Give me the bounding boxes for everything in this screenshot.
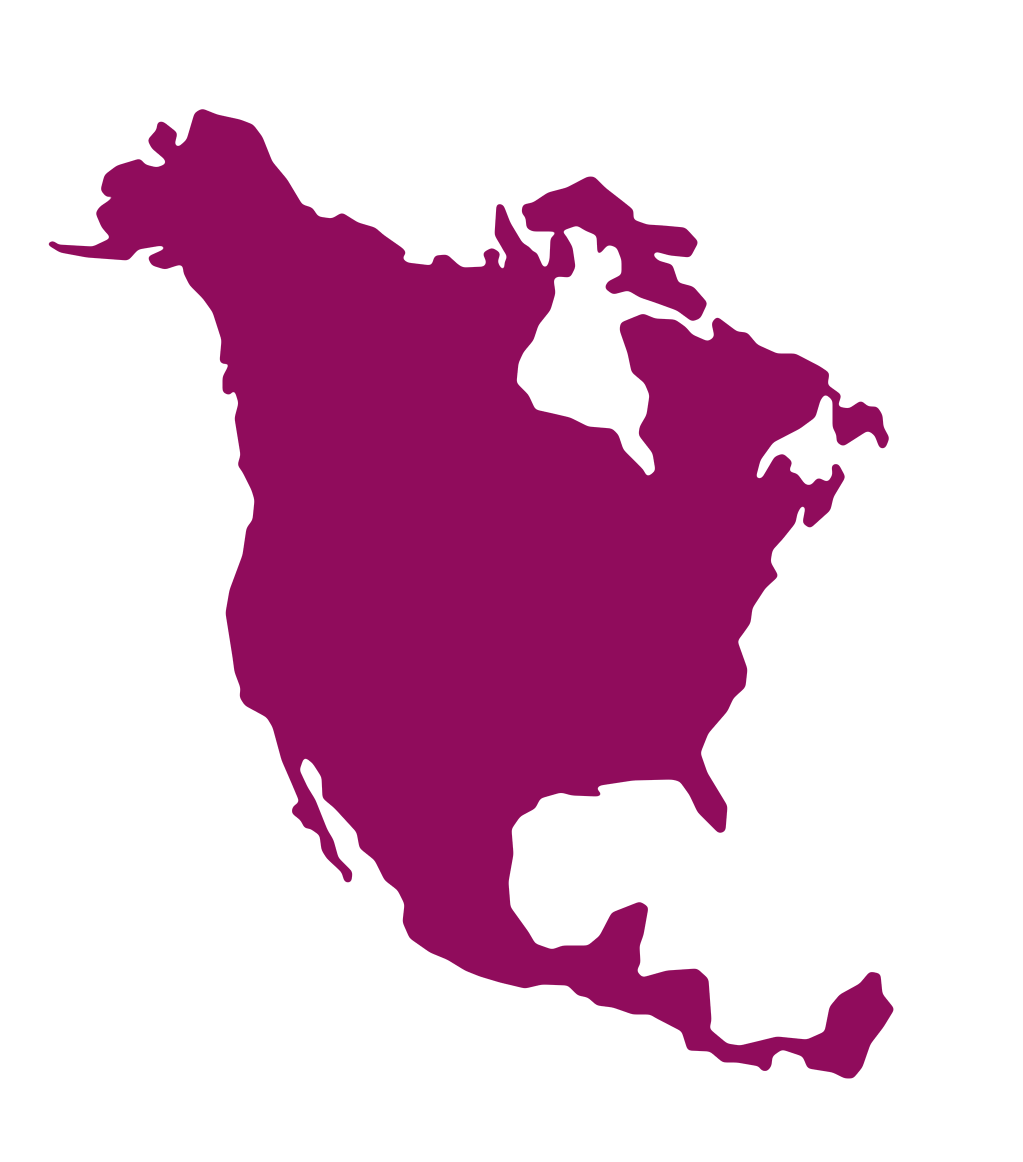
mainland: Alaska, Canada, USA, Mexico, Central America	[47, 109, 894, 1078]
map: North America silhouette	[47, 109, 894, 1078]
island: Canadian Arctic / Baffin	[522, 177, 707, 321]
